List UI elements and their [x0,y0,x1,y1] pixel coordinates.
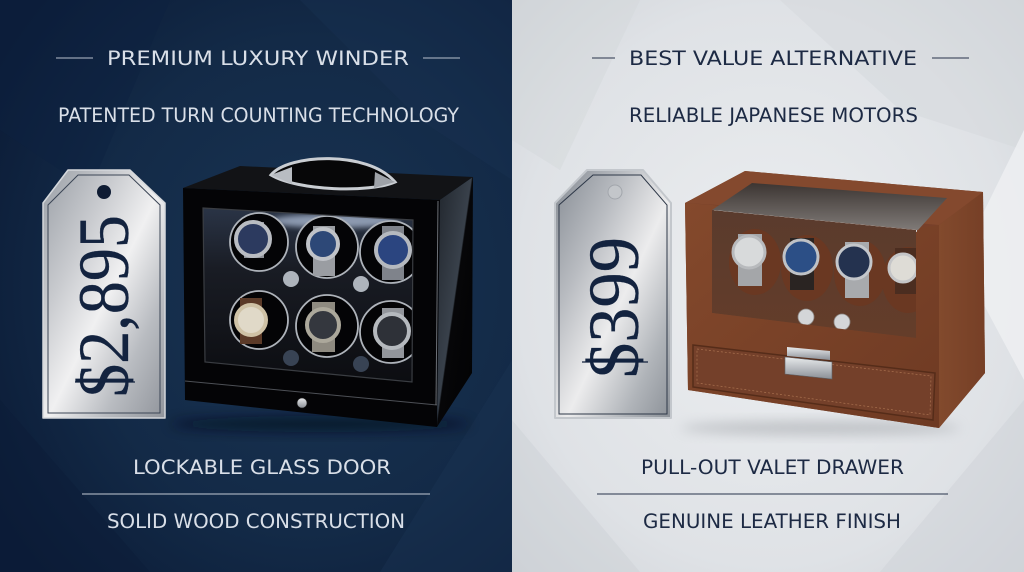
top glass [712,183,947,230]
text: patented technology: PATENTED TURN COUNTING TECHNOLOGY [58,104,459,127]
knobs [798,309,850,330]
price tag: $399: $399 [574,237,654,378]
text: genuine leather finish: GENUINE LEATHER FINISH [643,510,901,533]
panel: best value alternative [512,0,1024,572]
dials [733,236,917,282]
handle [271,159,395,189]
bracelets and straps [240,222,404,358]
clasp [785,347,832,379]
text: solid wood construction: SOLID WOOD CONSTRUCTION [107,510,405,533]
product: brown leather watch winder [680,171,985,435]
panel: premium luxury winder [0,0,512,572]
straps [738,234,917,298]
price tag: $399 [555,170,671,418]
drawer [693,345,935,420]
text: pull-out valet drawer: PULL-OUT VALET DRAWER [641,456,904,479]
heading: premium luxury winder: PREMIUM LUXURY WINDER [107,47,409,70]
cradles [729,229,934,313]
heading: best value alternative: BEST VALUE ALTERNATIVE [629,47,917,70]
window with six watches [203,208,422,382]
lock [297,398,307,408]
price tag: $2,895 [43,170,165,418]
text: lockable glass door: LOCKABLE GLASS DOOR [133,456,391,479]
window with four watches [712,210,934,338]
watch dials [236,222,410,348]
product: black lacquer watch winder [170,159,473,432]
text: reliable japanese motors: RELIABLE JAPANESE MOTORS [629,104,918,127]
winder cradles [230,213,422,363]
knobs [283,271,369,372]
price tag: $2,895: $2,895 [64,215,144,397]
